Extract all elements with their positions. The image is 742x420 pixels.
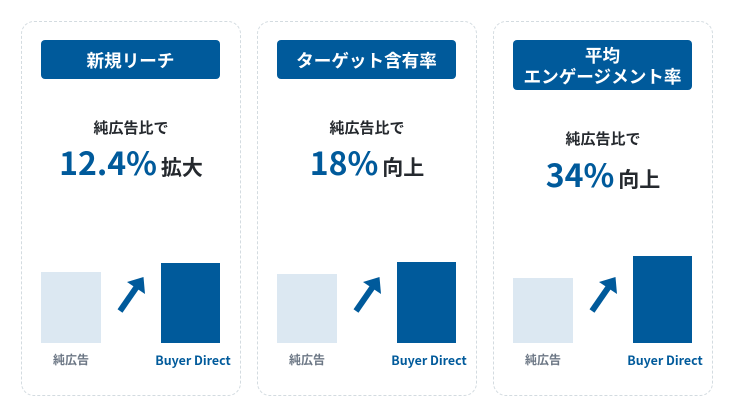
heading: average engagement rate	[513, 40, 692, 90]
heading: average engagement rate: 平均	[585, 43, 620, 68]
text: compared with pure ads: 純広告比で	[93, 117, 168, 138]
label: Buyer Direct: Buyer Direct	[627, 351, 703, 369]
text: compared with pure ads: 純広告比で	[565, 128, 640, 149]
stat: 18% improvement: 18%向上	[310, 139, 424, 185]
label: Buyer Direct: Buyer Direct	[391, 351, 467, 369]
bar: Buyer Direct	[633, 256, 692, 343]
bar: pure ads	[41, 272, 101, 343]
bar: Buyer Direct	[397, 262, 456, 343]
label: pure ads: 純広告	[53, 351, 89, 368]
heading: target inclusion rate: ターゲット含有率	[296, 48, 437, 73]
bar: pure ads	[277, 274, 337, 343]
heading: new reach	[41, 40, 220, 79]
arrow	[118, 277, 145, 313]
stat: 34% improvement: 34%向上	[546, 151, 660, 197]
heading: average engagement rate: エンゲージメント率	[524, 64, 682, 89]
label: pure ads: 純広告	[525, 351, 561, 368]
heading: target inclusion rate	[277, 40, 456, 79]
panel: target inclusion rate	[257, 21, 477, 396]
stat: 12.4% expansion: 12.4%拡大	[59, 139, 203, 185]
bar: pure ads	[513, 278, 573, 343]
text: compared with pure ads: 純広告比で	[329, 117, 404, 138]
label: pure ads: 純広告	[289, 351, 325, 368]
label: Buyer Direct: Buyer Direct	[155, 351, 231, 369]
heading: new reach: 新規リーチ	[86, 48, 174, 73]
arrow	[354, 277, 381, 313]
panel: new reach	[21, 21, 241, 396]
arrow	[590, 277, 617, 313]
bar: Buyer Direct	[161, 263, 220, 343]
panel: average engagement rate	[493, 21, 713, 396]
